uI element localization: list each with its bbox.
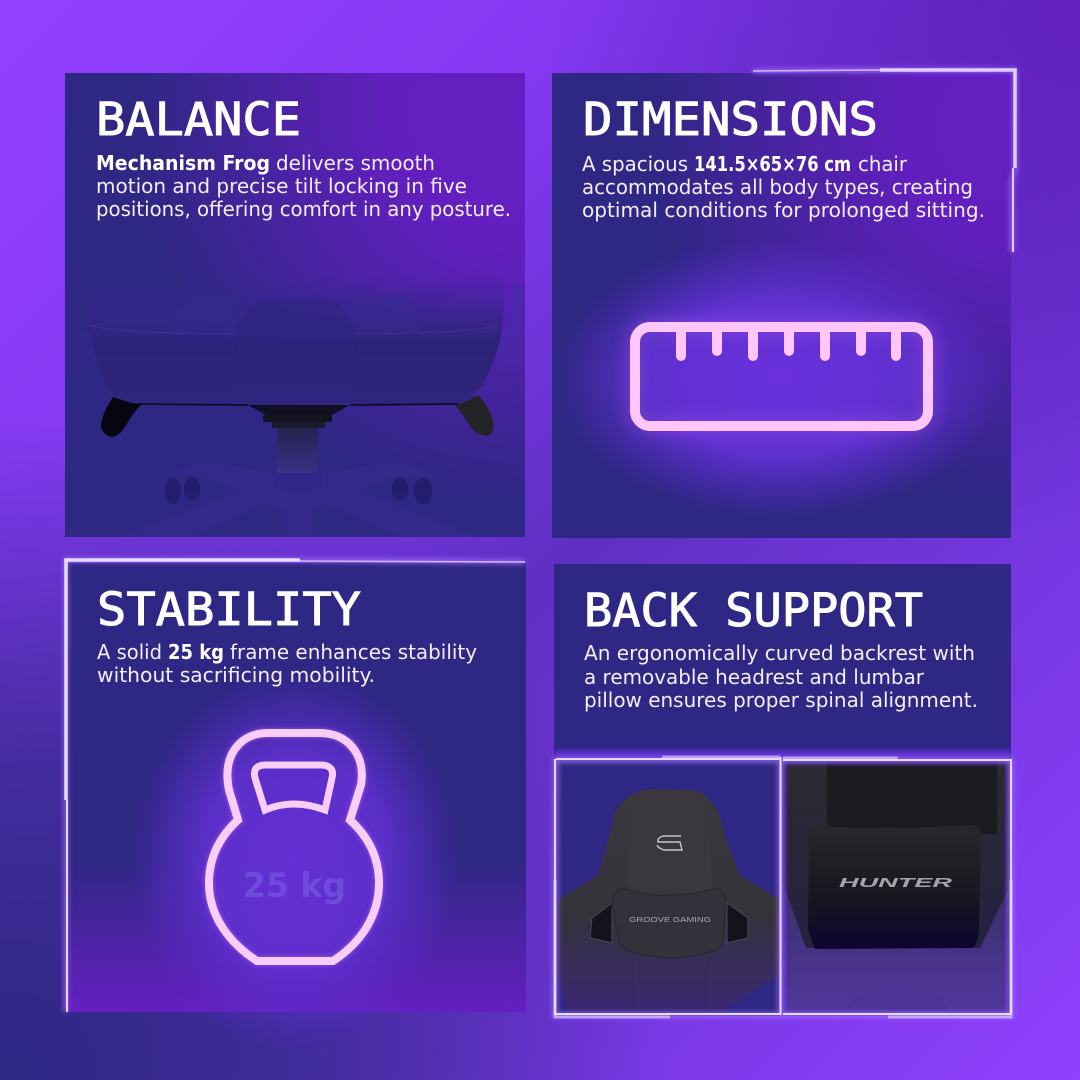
text block: balance description: positions, offering comfort in any posture. (96, 197, 511, 221)
text block: stability description: A solid (97, 640, 162, 664)
text block: balance description: delivers smooth (276, 151, 435, 175)
photo vignette (782, 760, 1010, 1016)
text block: dimensions description (582, 152, 985, 222)
text block: back support description: a removable headrest and lumbar (584, 665, 925, 689)
text block: stability description: without sacrificing mobility. (97, 663, 375, 687)
panel: balance (65, 73, 525, 537)
panel: dimensions (552, 73, 1011, 538)
casters (165, 477, 432, 504)
text block: balance description (96, 151, 511, 221)
photo: chair headrest (556, 760, 780, 1017)
neck pillow (612, 888, 726, 958)
text block: dimensions description: A spacious (582, 152, 688, 176)
gas lift column (263, 415, 332, 473)
heading: stability: STABILITY (97, 583, 361, 636)
text block: balance description: Mechanism Frog (96, 151, 270, 175)
heading: balance: BALANCE (96, 93, 301, 146)
neon frame: photo borders (555, 757, 1011, 1017)
heading: dimensions: DIMENSIONS (583, 93, 878, 146)
text block: back support description: An ergonomically curved backrest with (584, 641, 975, 665)
pillow brand text: HUNTER (839, 875, 953, 890)
armrests (65, 285, 525, 371)
text block: back support description: pillow ensures proper spinal alignment. (584, 688, 978, 712)
text block: stability description: 25 kg (168, 640, 224, 664)
kettlebell body (209, 733, 379, 961)
text block: balance description: motion and precise tilt locking in five (96, 174, 467, 198)
chair backrest (558, 789, 780, 1016)
glow above photos (554, 750, 1011, 764)
text block: stability description: frame enhances stability (230, 640, 477, 664)
text block: back support description (584, 641, 978, 712)
pillow (808, 825, 981, 949)
photo: lumbar pillow (782, 760, 1010, 1040)
seat cushion (88, 275, 505, 404)
kettlebell handle (254, 765, 333, 810)
panel: stability (65, 563, 526, 1050)
heading: back support: BACK SUPPORT (584, 584, 923, 637)
seat brackets (101, 395, 493, 437)
panel: back support (554, 564, 1011, 1040)
neon frame: stability corner (66, 560, 525, 1012)
five-star base (120, 462, 480, 537)
text block: dimensions description: optimal conditions for prolonged sitting. (582, 198, 985, 222)
seat surface (782, 880, 1008, 1016)
neon frame: dimensions corner (753, 70, 1015, 252)
icon: neon kettlebell (209, 733, 379, 961)
icon: neon ruler (635, 327, 928, 426)
text block: dimensions description: accommodates all body types, creating (582, 175, 973, 199)
chair base illustration (65, 275, 525, 537)
weight label: 25 kg (243, 866, 346, 906)
text block: dimensions description: 141.5×65×76 cm (694, 152, 851, 176)
text block: dimensions description: chair (858, 152, 908, 176)
pillow brand text: GROOVE GAMING (629, 917, 711, 924)
text block: stability description (97, 640, 477, 687)
logo mark (657, 836, 682, 850)
